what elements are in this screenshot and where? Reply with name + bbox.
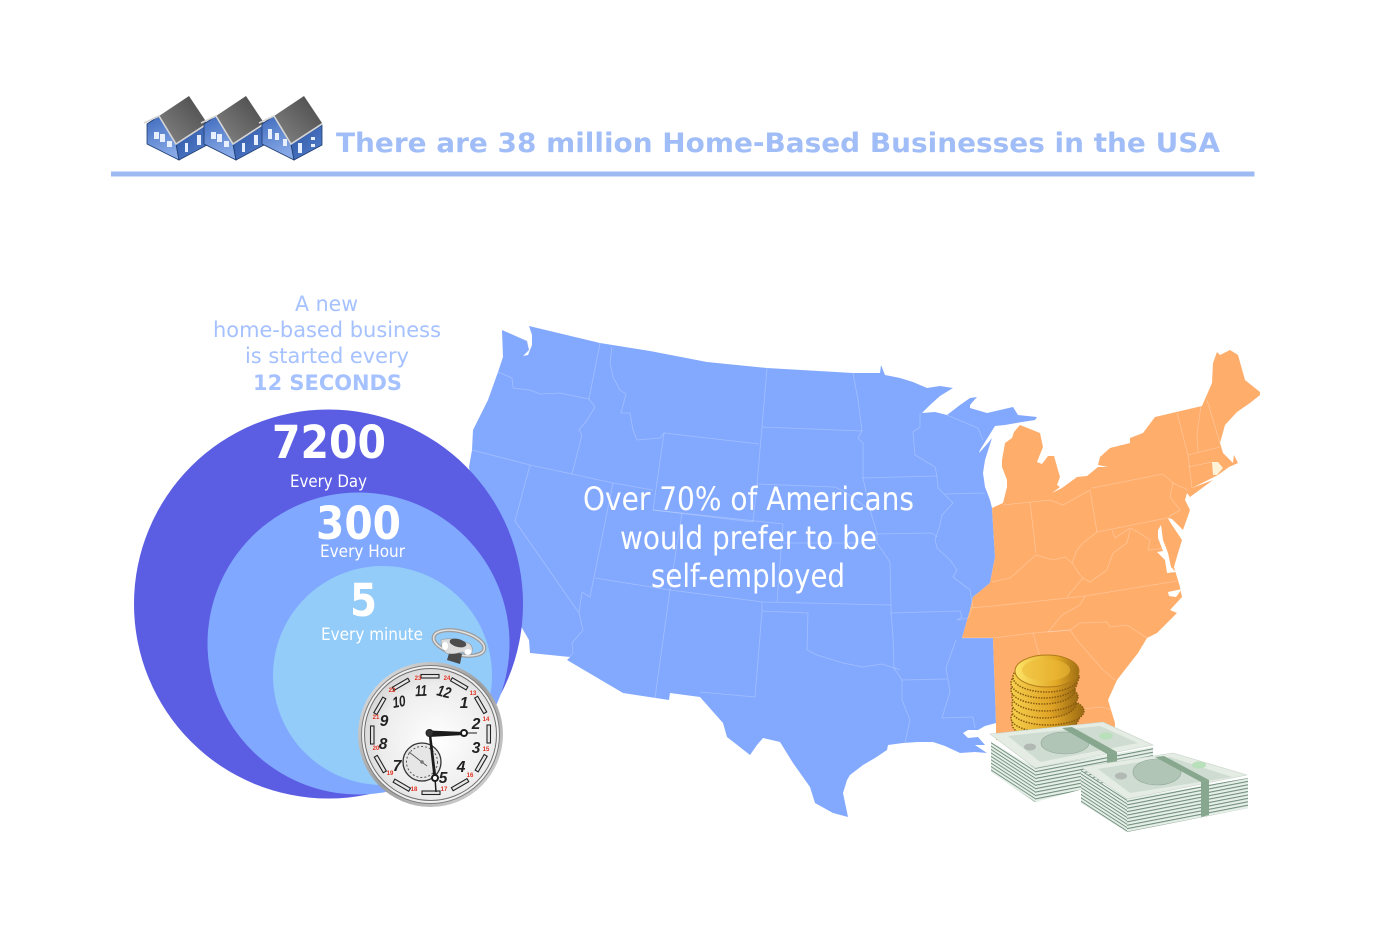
map caption: over 70% of Americans: Over 70% of Americans — [583, 480, 914, 518]
icon: house 2 — [201, 96, 264, 160]
map: Chesapeake Bay — [1157, 525, 1176, 573]
stopwatch case — [358, 662, 503, 807]
circle: every hour — [208, 492, 510, 794]
icon: stopwatch — [358, 626, 503, 807]
stopwatch dial — [364, 668, 496, 800]
dial hour numerals: 3 — [472, 740, 481, 757]
dial 24-hour numerals: 20 — [373, 746, 380, 752]
circle: every minute — [273, 566, 492, 785]
map caption: over 70% of Americans — [583, 480, 914, 595]
dial 24-hour numerals: 17 — [441, 787, 448, 793]
label: every minute: Every minute — [321, 625, 423, 645]
stopwatch hands — [426, 730, 477, 792]
dial 24-hour numerals: 19 — [387, 771, 394, 777]
dial hour numerals: 4 — [456, 759, 466, 776]
dial hour numerals: 11 — [415, 683, 428, 700]
icon: house 3 — [259, 96, 322, 160]
icon: money bundle back — [990, 722, 1153, 802]
dial hour numerals: 8 — [379, 736, 388, 753]
dial hour numerals: 1 — [460, 695, 468, 712]
dial hour numerals: 9 — [380, 713, 389, 730]
map: blue states — [469, 326, 1037, 817]
dial 24-hour numerals: 14 — [483, 717, 490, 723]
dial 24-hour numerals: 21 — [373, 715, 380, 721]
dial 24-hour numerals: 15 — [483, 747, 490, 753]
icon: stack of gold coins — [1011, 655, 1084, 738]
text block: a new business every 12 seconds: is started every — [245, 344, 409, 368]
text block: a new business every 12 seconds: A new — [295, 292, 358, 316]
dial 24-hour numerals: 13 — [470, 691, 477, 697]
map: state boundaries on orange states — [962, 400, 1220, 712]
map: orange eastern states — [962, 350, 1260, 740]
dial track segments — [370, 674, 490, 794]
dial hour numerals: 2 — [471, 716, 481, 733]
dial hour numerals: 7 — [393, 758, 403, 775]
map: pale Rhode Island — [1212, 462, 1223, 475]
stat: 7200: 7200 — [272, 416, 386, 469]
text block: a new business every 12 seconds — [213, 292, 441, 395]
map: Pamlico Sound — [1168, 589, 1182, 597]
dial 24-hour numerals: 22 — [389, 688, 396, 694]
label: every hour: Every Hour — [320, 542, 405, 562]
map of the USA — [469, 326, 1260, 817]
icon: house 1 — [144, 96, 207, 160]
stat: 300: 300 — [316, 497, 401, 550]
text block: a new business every 12 seconds: home-based business — [213, 318, 441, 342]
dial 24-hour numerals: 24 — [444, 676, 451, 682]
dial hour numerals: 12 — [435, 683, 453, 702]
dial 24-hour numerals — [373, 676, 490, 793]
map caption: over 70% of Americans: would prefer to be — [620, 519, 877, 557]
dial 24-hour numerals: 23 — [415, 676, 422, 682]
icon: row of three houses — [144, 96, 322, 160]
icon: money bundle front — [1081, 753, 1248, 832]
stat: 5: 5 — [350, 574, 377, 627]
map: state boundaries on blue states — [472, 343, 985, 743]
circle: every day — [134, 410, 523, 798]
dial hour numerals — [379, 683, 481, 787]
stopwatch bow and crown — [431, 626, 487, 664]
title: There are 38 million Home-Based Businesses in the USA — [336, 128, 1220, 159]
header: houses, title and rule — [111, 96, 1254, 176]
dial 24-hour numerals: 16 — [467, 773, 474, 779]
text block: a new business every 12 seconds: 12 SECONDS — [253, 371, 402, 395]
dial 24-hour numerals: 18 — [411, 787, 418, 793]
map caption: over 70% of Americans: self-employed — [651, 557, 845, 595]
label: every day: Every Day — [290, 472, 367, 492]
nested circles: rate of new businesses — [134, 410, 523, 798]
dial hour numerals: 10 — [391, 693, 407, 712]
sub-dial — [403, 743, 441, 781]
dial hour numerals: 5 — [439, 770, 448, 787]
